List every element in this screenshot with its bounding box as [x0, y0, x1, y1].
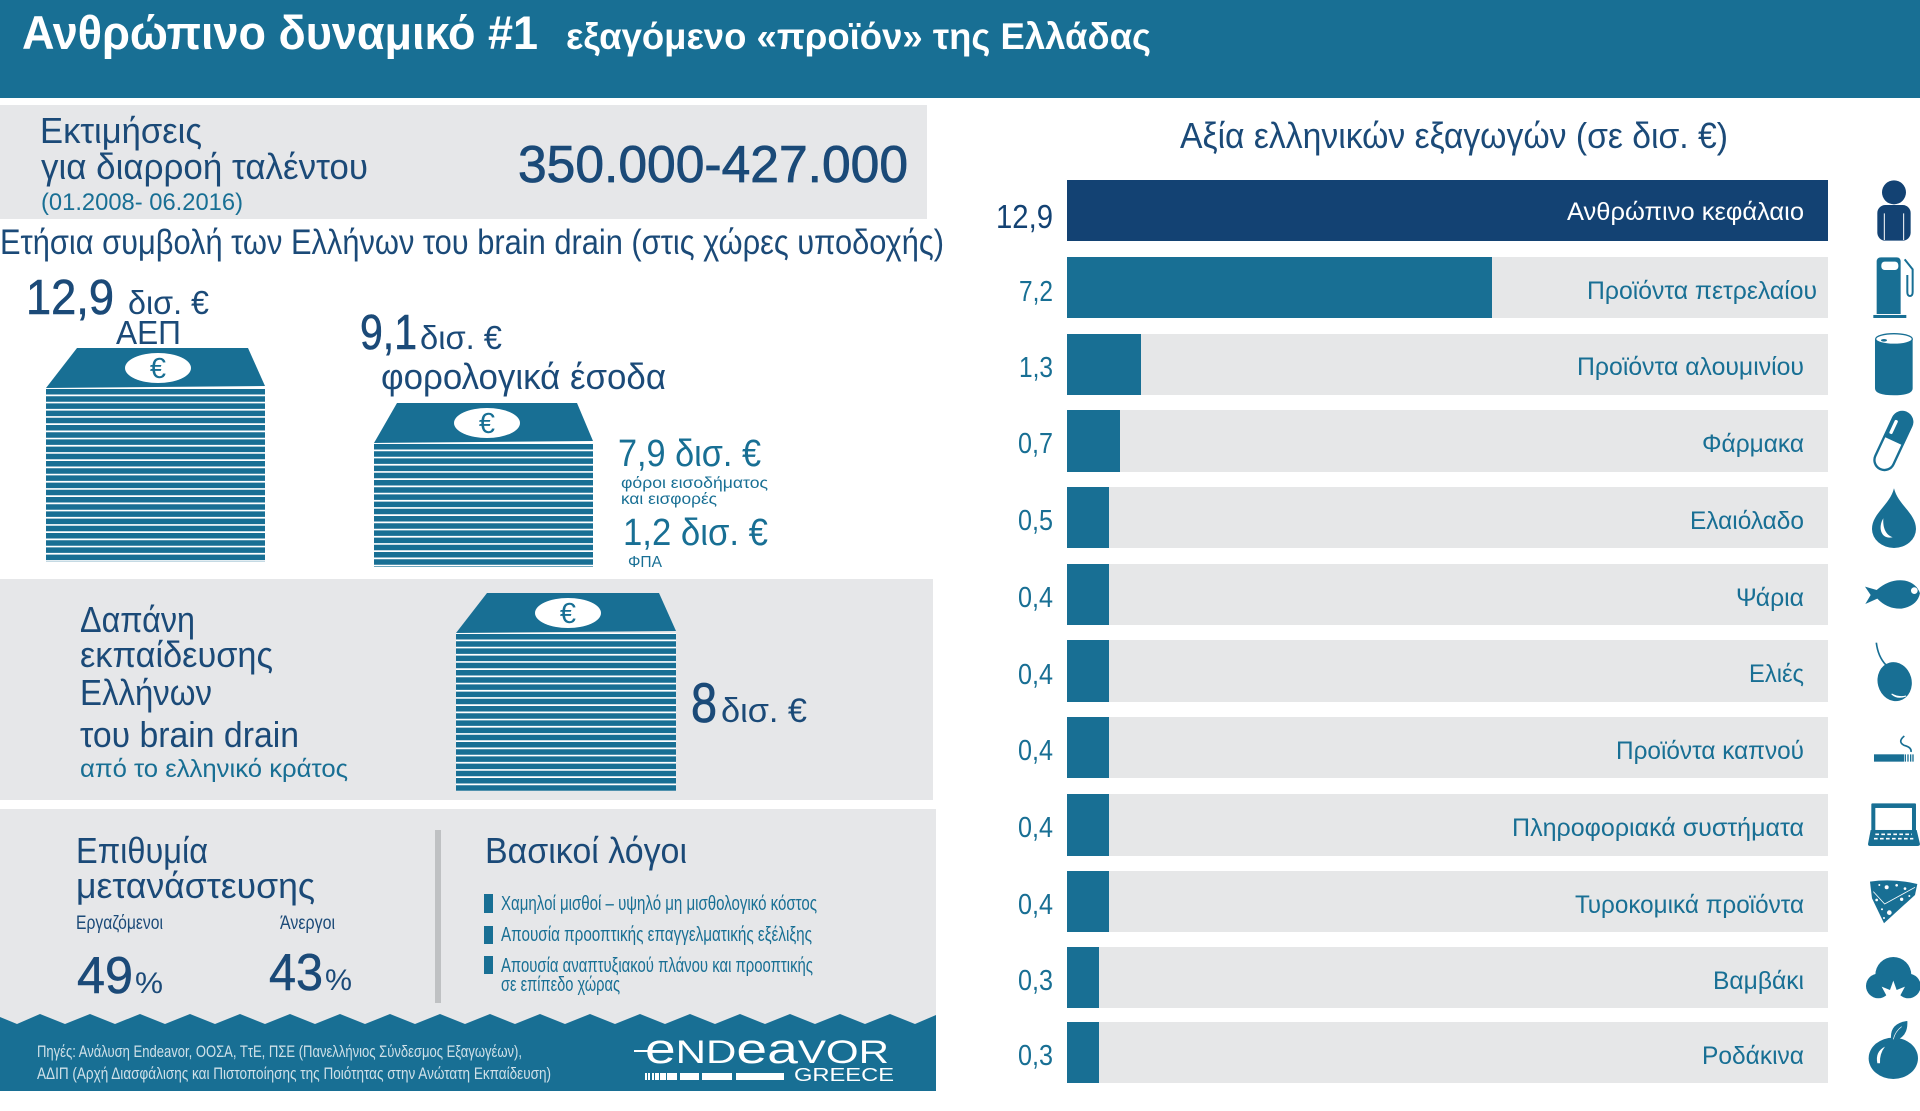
bar: oil products: Προϊόντα πετρελαίου	[1587, 277, 1817, 305]
bar chart: exports	[996, 180, 1828, 1083]
chart heading: Αξία ελληνικών εξαγωγών (σε δισ. €)	[1180, 115, 1728, 156]
panel: migration desire: Επιθυμία	[76, 830, 208, 871]
bar: IT systems: Πληροφοριακά συστήματα	[1512, 814, 1804, 842]
bar: pharma: Φάρμακα	[1702, 430, 1804, 458]
panel: talent drain estimate: για διαρροή ταλέντου	[41, 146, 368, 187]
footer band: ΑΔΙΠ (Αρχή Διασφάλισης και Πιστοποίησης της Ποιότητας στην Ανώτατη Εκπαίδευση)	[37, 1064, 551, 1083]
panel: migration desire: 49	[77, 947, 133, 1005]
bar: aluminium: Προϊόντα αλουμινίου	[1577, 353, 1804, 381]
bar: cotton: Βαμβάκι	[1713, 967, 1804, 995]
bar: peaches: 0,3	[1018, 1040, 1053, 1072]
tax breakdown: φόροι εισοδήματος	[621, 475, 768, 492]
panel: education cost: του brain drain	[80, 714, 299, 755]
title: Ανθρώπινο δυναμικό #1	[22, 6, 538, 59]
bar: aluminium: 1,3	[1019, 352, 1053, 384]
bar: peaches: Ροδάκινα	[1702, 1042, 1804, 1070]
panel: talent drain estimate: Εκτιμήσεις	[40, 110, 202, 151]
bar: fish: Ψάρια	[1736, 584, 1804, 612]
bar: tobacco: 0,4	[1018, 735, 1053, 767]
panel: education cost: Δαπάνη	[80, 599, 195, 640]
bar: olives: Ελιές	[1749, 660, 1804, 688]
bar: human capital	[996, 180, 1828, 241]
bar: olives: 0,4	[1018, 659, 1053, 691]
bar: fish: 0,4	[1018, 582, 1053, 614]
bar: tobacco: Προϊόντα καπνού	[1616, 737, 1804, 765]
bar: human capital: Ανθρώπινο κεφάλαιο	[1567, 198, 1804, 226]
key reasons: σε επίπεδο χώρας	[501, 974, 620, 996]
bar: dairy: Τυροκομικά προϊόντα	[1575, 891, 1804, 919]
key reasons: Βασικοί λόγοι	[485, 830, 687, 871]
bar: dairy: 0,4	[1018, 889, 1053, 921]
icons column lower	[1866, 643, 1920, 1079]
bar: olives	[1018, 640, 1828, 702]
tax revenue value	[360, 306, 666, 397]
icon: money stack education: €	[560, 598, 576, 630]
bar: peaches	[1018, 1022, 1828, 1083]
icon: money stack tax: €	[479, 408, 495, 440]
icon: barrel	[1875, 334, 1913, 395]
icon: cotton	[1866, 957, 1920, 999]
icon: money stack GDP	[46, 348, 265, 562]
bar: cotton	[1018, 947, 1828, 1008]
bar: human capital: 12,9	[996, 198, 1053, 235]
tax breakdown: 1,2 δισ. €	[623, 512, 768, 554]
bar: olive oil: 0,5	[1018, 505, 1053, 537]
icons column upper	[1865, 180, 1920, 609]
tax breakdown: και εισφορές	[621, 491, 717, 508]
icon: cheese	[1870, 880, 1917, 923]
education value: δισ. €	[721, 692, 807, 730]
panel: migration desire	[0, 809, 936, 1024]
bar: olive oil: Ελαιόλαδο	[1690, 507, 1804, 535]
tax breakdown: 7,9 δισ. €	[618, 433, 761, 475]
header banner	[0, 0, 1920, 98]
icon: money stack education	[456, 593, 676, 791]
bar: fish	[1018, 564, 1828, 625]
bar: IT systems: 0,4	[1018, 812, 1053, 844]
sources: Πηγές: Ανάλυση Endeavor, ΟΟΣΑ, ΤτΕ, ΠΣΕ (Πανελλήνιος Σύνδεσμος Εξαγωγέων),	[37, 1042, 522, 1061]
bar: oil products: 7,2	[1019, 276, 1053, 308]
icon: fuel pump	[1873, 257, 1913, 318]
bar: dairy	[1018, 871, 1828, 932]
icon: olive	[1873, 643, 1916, 705]
GDP value: ΑΕΠ	[116, 314, 181, 351]
icon: cigarette	[1874, 736, 1913, 762]
icon: money stack tax	[374, 403, 593, 567]
panel: education cost: από το ελληνικό κράτος	[80, 755, 348, 783]
panel: education cost: Ελλήνων	[80, 672, 212, 713]
panel: migration desire: 43	[269, 944, 323, 1002]
tax revenue value: φορολογικά έσοδα	[381, 356, 666, 397]
tax breakdown: ΦΠΑ	[628, 554, 662, 571]
icon: fish	[1865, 580, 1920, 609]
key reasons: Χαμηλοί μισθοί – υψηλό μη μισθολογικό κόστος	[501, 893, 817, 915]
logo: Endeavor Greece	[634, 1025, 894, 1085]
bar: tobacco	[1018, 717, 1828, 778]
logo: Endeavor Greece: eND ea VOR	[645, 1025, 889, 1072]
footer band	[0, 1014, 936, 1091]
key reasons: Απουσία προοπτικής επαγγελματικής εξέλιξης	[501, 924, 812, 946]
education value	[691, 671, 807, 734]
bar: aluminium	[1019, 334, 1828, 395]
panel: migration desire: Εργαζόμενοι	[76, 913, 163, 934]
bar: pharma	[1018, 410, 1828, 472]
bar: olive oil	[1018, 487, 1828, 548]
bar: cotton: 0,3	[1018, 965, 1053, 997]
big number: 350.000-427.000	[518, 136, 908, 194]
subtitle: εξαγόμενο «προϊόν» της Ελλάδας	[566, 16, 1151, 57]
panel: talent drain estimate	[0, 105, 927, 219]
tax revenue value: δισ. €	[420, 319, 502, 356]
icon: person	[1877, 180, 1911, 241]
panel: education cost: εκπαίδευσης	[80, 634, 273, 675]
tax breakdown	[618, 433, 768, 571]
bar: IT systems	[1018, 794, 1828, 856]
icon: peach	[1869, 1021, 1918, 1079]
tax revenue value: 9,1	[360, 306, 417, 360]
panel: migration desire: %	[135, 967, 163, 1000]
logo: Endeavor Greece: GREECE	[794, 1065, 894, 1085]
GDP value: 12,9	[26, 271, 114, 325]
key reasons	[484, 830, 817, 996]
icon: money stack GDP: €	[150, 353, 166, 385]
panel: education cost	[0, 579, 933, 800]
GDP value: δισ. €	[128, 284, 209, 321]
panel: migration desire: Άνεργοι	[280, 913, 335, 934]
heading: annual contribution: Ετήσια συμβολή των Ελλήνων του brain drain (στις χώρες υποδοχής)	[0, 223, 944, 262]
icon: oil drop	[1872, 488, 1916, 548]
education value: 8	[691, 671, 717, 734]
key reasons: Απουσία αναπτυξιακού πλάνου και προοπτικής	[501, 955, 813, 977]
bar: pharma: 0,7	[1018, 428, 1053, 460]
GDP value	[26, 271, 209, 351]
icon: capsule	[1870, 407, 1917, 474]
icon: laptop	[1868, 803, 1920, 846]
panel: talent drain estimate: (01.2008- 06.2016)	[41, 189, 243, 216]
panel: migration desire: %	[325, 964, 352, 997]
bar: oil products	[1019, 257, 1828, 318]
panel: migration desire: μετανάστευσης	[76, 865, 315, 906]
